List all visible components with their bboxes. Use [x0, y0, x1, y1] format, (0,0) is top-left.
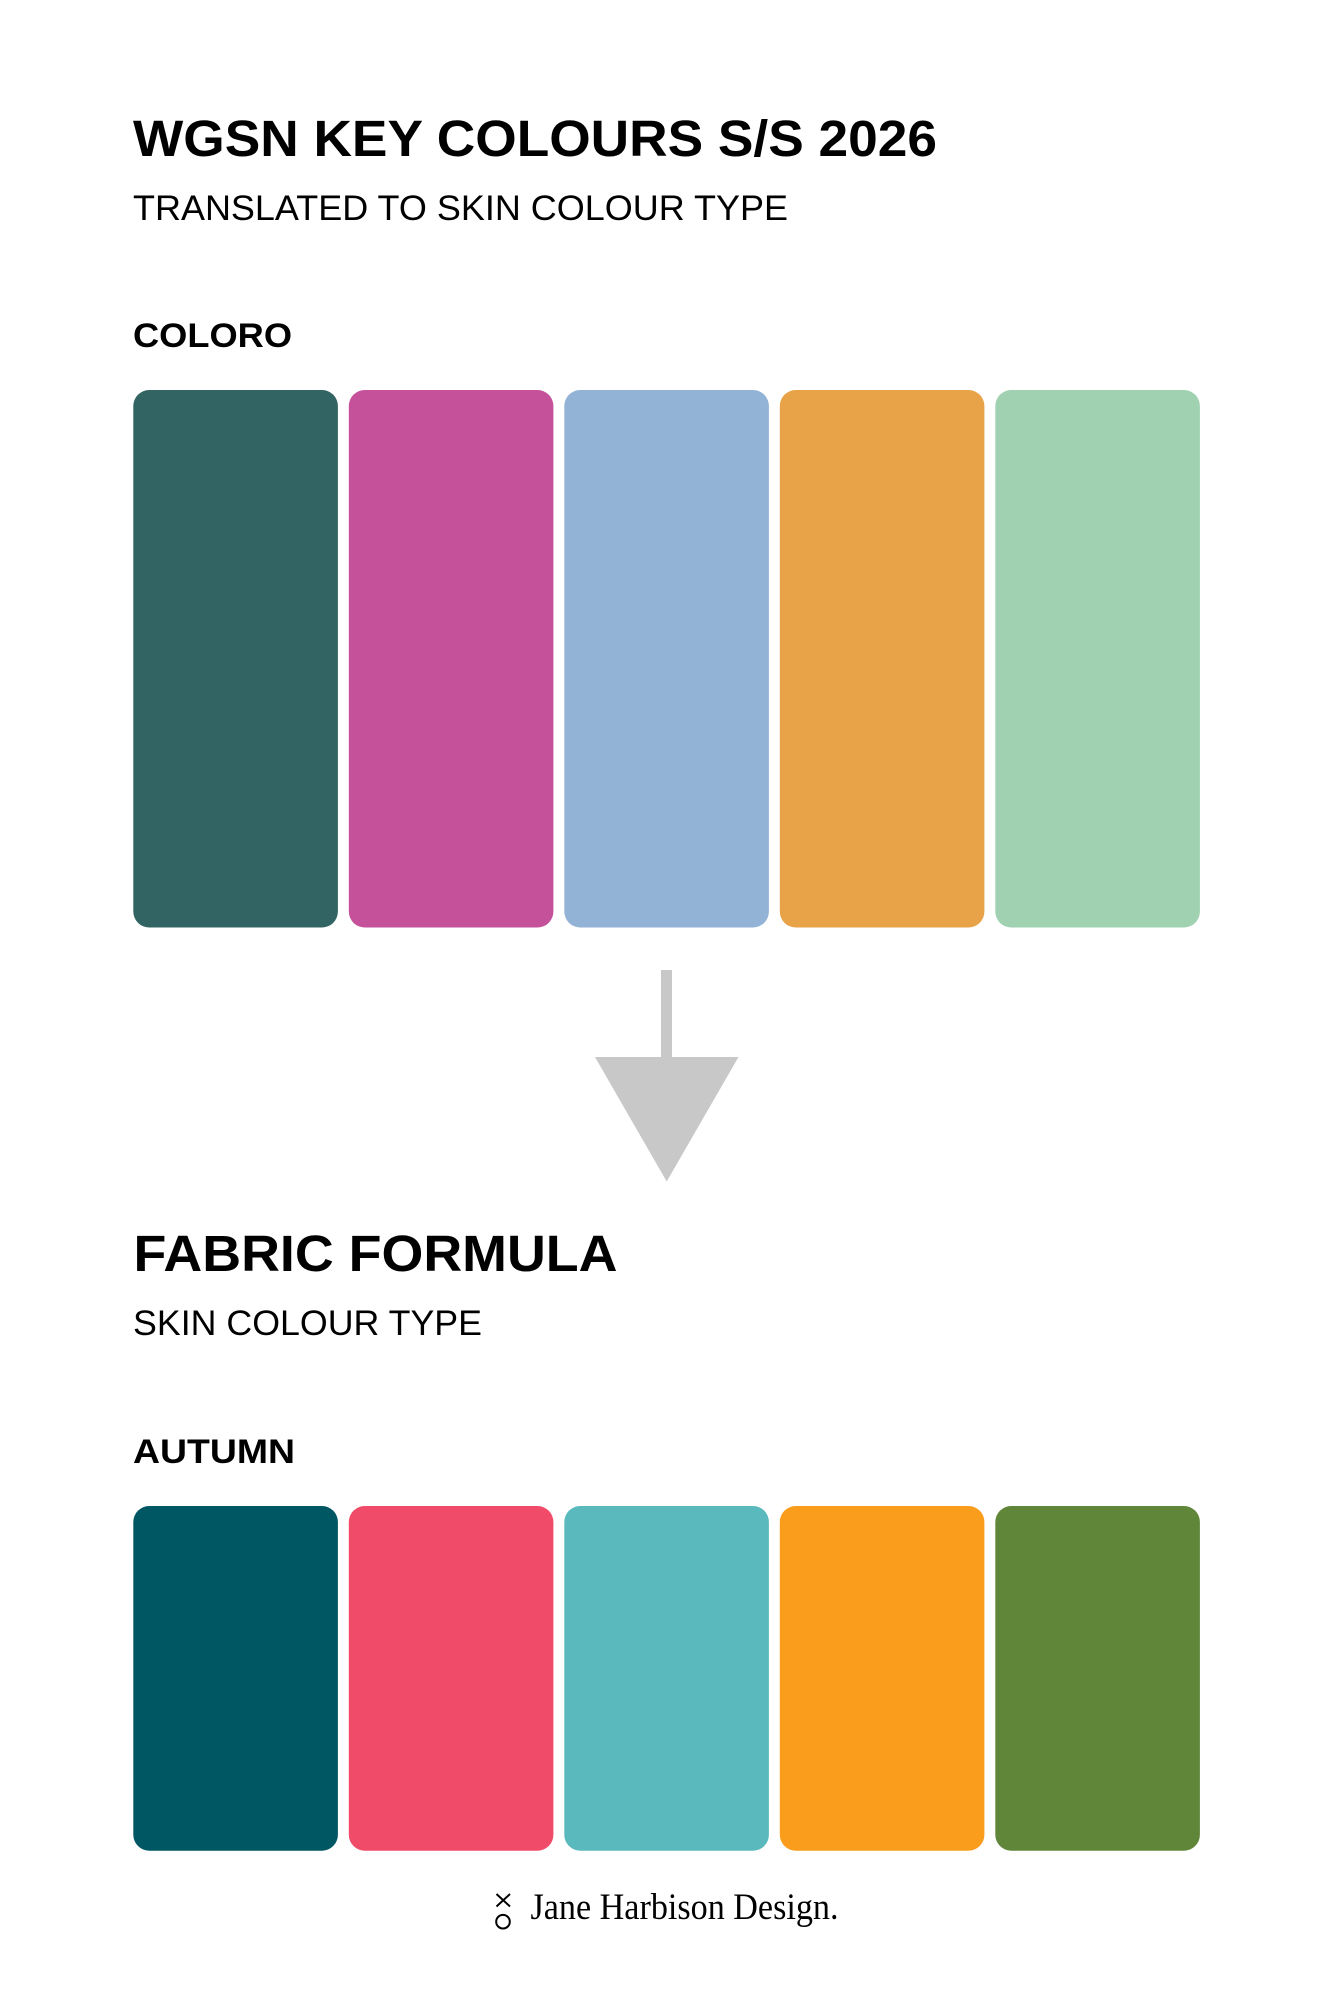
swatch: coral red — [349, 1506, 553, 1851]
swatch: sky blue — [564, 390, 769, 928]
subheading: skin colour type: SKIN COLOUR TYPE — [133, 1303, 482, 1343]
heading: fabric formula: FABRIC FORMULA — [134, 1225, 618, 1282]
swatch: amber — [780, 390, 984, 928]
heading: autumn: AUTUMN — [133, 1433, 295, 1471]
swatch: olive green — [995, 1506, 1200, 1851]
swatch: mint — [995, 390, 1200, 928]
heading: coloro: COLORO — [133, 317, 292, 355]
title: WGSN KEY COLOURS S/S 2026 — [133, 110, 937, 167]
wordmark: Jane Harbison Design. — [530, 1887, 838, 1928]
panel: coloro swatches — [133, 390, 1200, 928]
subtitle: TRANSLATED TO SKIN COLOUR TYPE — [133, 188, 788, 228]
swatch: turquoise — [564, 1506, 769, 1851]
swatch: orange — [780, 1506, 984, 1851]
swatch: deep teal — [133, 390, 338, 928]
arrow — [595, 970, 738, 1182]
icon: xo mark — [496, 1894, 510, 1928]
swatch: petrol — [133, 1506, 338, 1851]
panel: autumn swatches — [133, 1506, 1200, 1851]
logo: jane harbison design — [496, 1887, 838, 1928]
swatch: magenta — [349, 390, 553, 928]
